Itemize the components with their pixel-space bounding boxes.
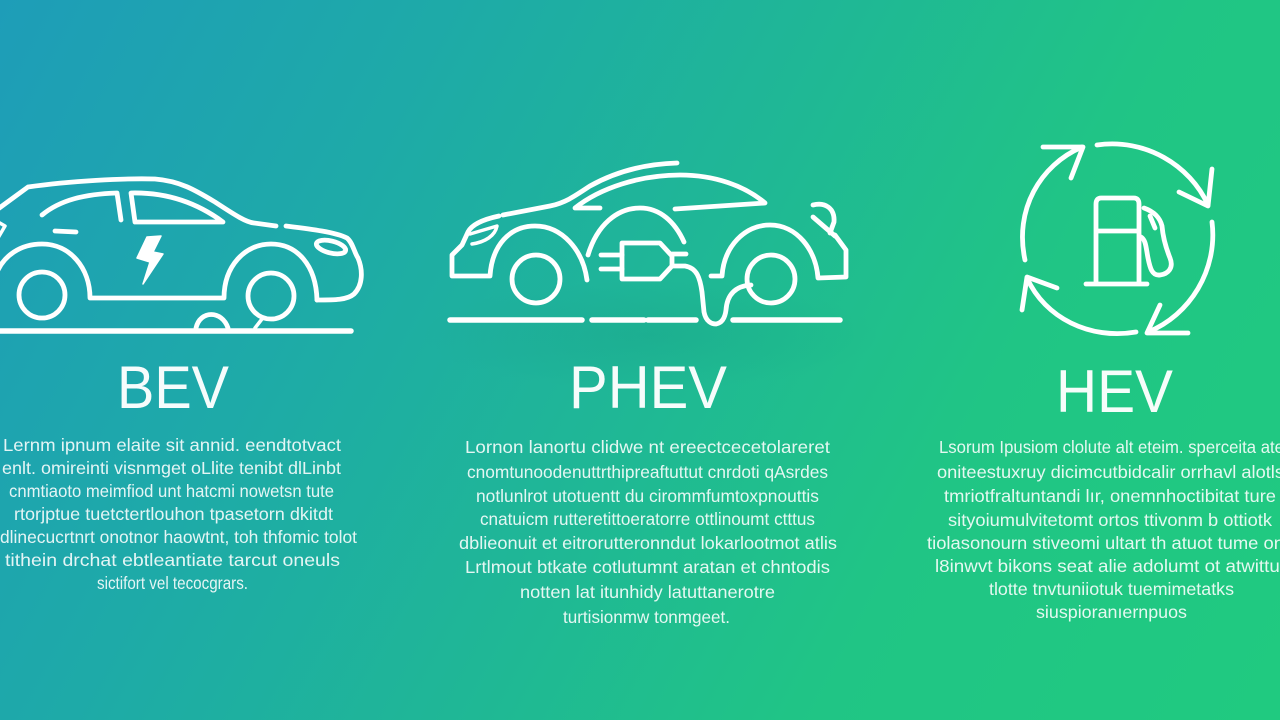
text block: BEV description bbox=[0, 435, 357, 593]
text block: PHEV description: Lornon lanortu clidwe nt ereectcecetolareret bbox=[465, 437, 830, 457]
text block: PHEV description bbox=[459, 437, 837, 627]
text block: BEV description: cnmtiaoto meimfiod unt hatcmi nowetsn tute bbox=[9, 481, 334, 501]
text block: PHEV description: dblieonuit et eitrorutteronndut lokarlootmot atlis bbox=[459, 533, 837, 553]
text block: PHEV description: notlunlrot utotuentt du cirommfumtoxpnouttis bbox=[476, 486, 819, 506]
text block: BEV description: rtorjptue tuetctertlouhon tpasetorn dkitdt bbox=[14, 504, 333, 524]
heading: BEV: BEV bbox=[117, 354, 229, 421]
text block: PHEV description: Lrtlmout btkate cotlutumnt aratan et chntodis bbox=[465, 557, 830, 577]
icon: plug-in hybrid car bbox=[450, 163, 846, 324]
text block: HEV description: tmriotfraltuntandi lır, onemnhoctibitat ture bbox=[944, 486, 1276, 506]
icon: plug and cord bbox=[622, 243, 672, 279]
icon: fuel pump bbox=[1086, 198, 1147, 284]
icon: electric car bbox=[0, 179, 361, 331]
text block: HEV description: tlotte tnvtuniiotuk tuemimetatks bbox=[989, 579, 1234, 599]
panel: HEV bbox=[927, 144, 1280, 622]
heading: PHEV: PHEV bbox=[569, 354, 727, 421]
text block: BEV description: dlinecucrtnrt onotnor haowtnt, toh thfomic tolot bbox=[0, 527, 357, 547]
text block: BEV description: sictifort vel tecocgrars. bbox=[97, 573, 248, 593]
text block: BEV description: tithein drchat ebtleantiate tarcut oneuls bbox=[5, 550, 340, 570]
text block: HEV description: oniteestuxruy dicimcutbidcalir orrhavl alotls bbox=[937, 462, 1280, 482]
text block: HEV description: l8inwvt bikons seat alie adolumt ot atwittul bbox=[935, 556, 1280, 576]
text block: BEV description: Lernm ipnum elaite sit annid. eendtotvact bbox=[3, 435, 341, 455]
text block: HEV description: siuspioranıernpuos bbox=[1036, 602, 1187, 622]
text block: HEV description: sityoiumulvitetomt ortos ttivonm b ottiotk bbox=[948, 510, 1272, 530]
text block: PHEV description: cnatuicm rutteretittoeratorre ottlinoumt ctttus bbox=[480, 509, 815, 529]
text block: PHEV description: turtisionmw tonmgeet. bbox=[563, 607, 730, 627]
panel: BEV bbox=[0, 179, 361, 593]
icon: recycling arrows with fuel pump bbox=[1022, 144, 1213, 334]
text block: PHEV description: notten lat itunhidy latuttanerotre bbox=[520, 582, 775, 602]
text block: BEV description: enlt. omireinti visnmget oLlite tenibt dlLinbt bbox=[2, 458, 341, 478]
panel: PHEV bbox=[450, 163, 846, 627]
icon: lightning bolt bbox=[137, 236, 163, 284]
text block: HEV description bbox=[927, 437, 1280, 622]
heading: HEV: HEV bbox=[1056, 358, 1173, 425]
text block: PHEV description: cnomtunoodenuttrthipreaftuttut cnrdoti qAsrdes bbox=[467, 462, 828, 482]
text block: HEV description: tiolasonourn stiveomi ultart th atuot tume on bbox=[927, 533, 1280, 553]
